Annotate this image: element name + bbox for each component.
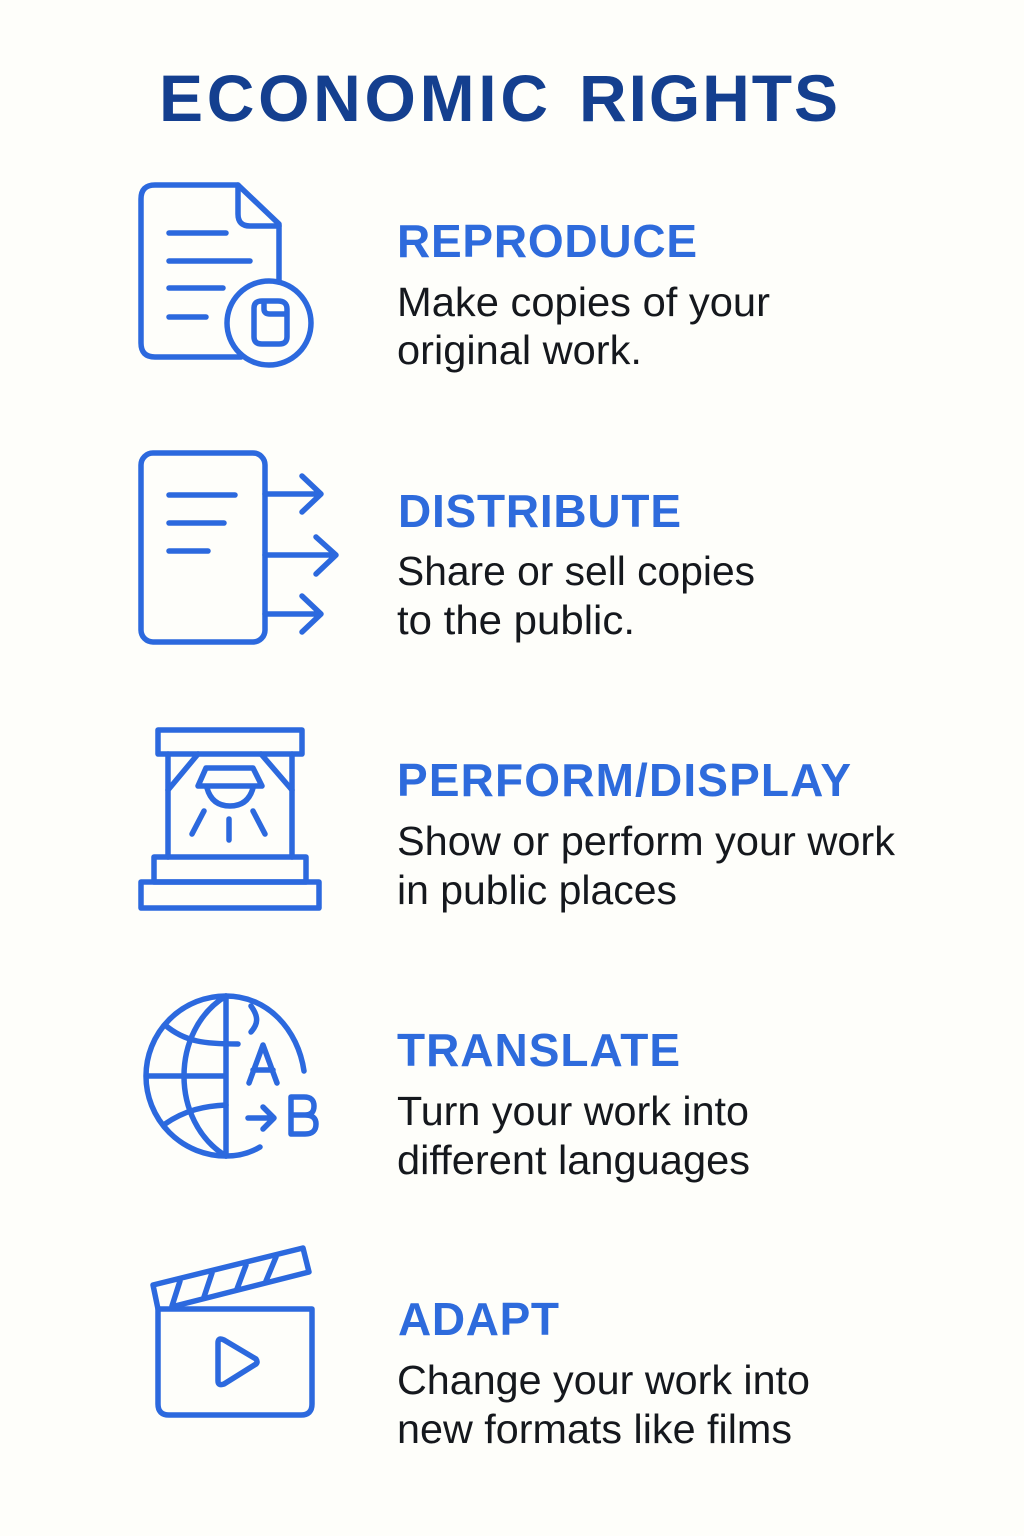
heading: reproduce: REPRODUCE — [397, 215, 697, 267]
text: distribute description: to the public. — [397, 597, 635, 643]
heading: distribute: DISTRIBUTE — [398, 485, 681, 537]
text: reproduce description: original work. — [397, 327, 642, 373]
text: adapt description: Change your work into — [397, 1357, 810, 1403]
text: translate description: different languages — [397, 1137, 750, 1183]
text: reproduce description: Make copies of your — [397, 279, 770, 325]
panel: adapt — [153, 1248, 810, 1452]
panel: translate — [146, 996, 750, 1183]
heading: perform/display: PERFORM/DISPLAY — [397, 754, 851, 806]
heading: adapt: ADAPT — [398, 1293, 559, 1345]
icon: document with copy badge — [141, 185, 311, 365]
icon: document with outgoing arrows — [141, 453, 336, 642]
text: translate description: Turn your work into — [397, 1088, 749, 1134]
panel: distribute — [141, 453, 755, 643]
panel: perform/display — [141, 730, 895, 913]
title: ECONOMIC — [159, 61, 548, 135]
text: adapt description: new formats like films — [397, 1406, 792, 1452]
icon: clapperboard with play button — [153, 1248, 312, 1415]
title: RIGHTS — [579, 61, 838, 135]
icon: globe with A to B — [146, 996, 316, 1156]
text: perform/display description: Show or perform your work — [397, 818, 895, 864]
icon: stage with spotlight — [141, 730, 319, 908]
heading: translate: TRANSLATE — [397, 1024, 680, 1076]
panel: reproduce — [141, 185, 770, 373]
text: distribute description: Share or sell copies — [397, 548, 755, 594]
text: perform/display description: in public places — [397, 867, 677, 913]
